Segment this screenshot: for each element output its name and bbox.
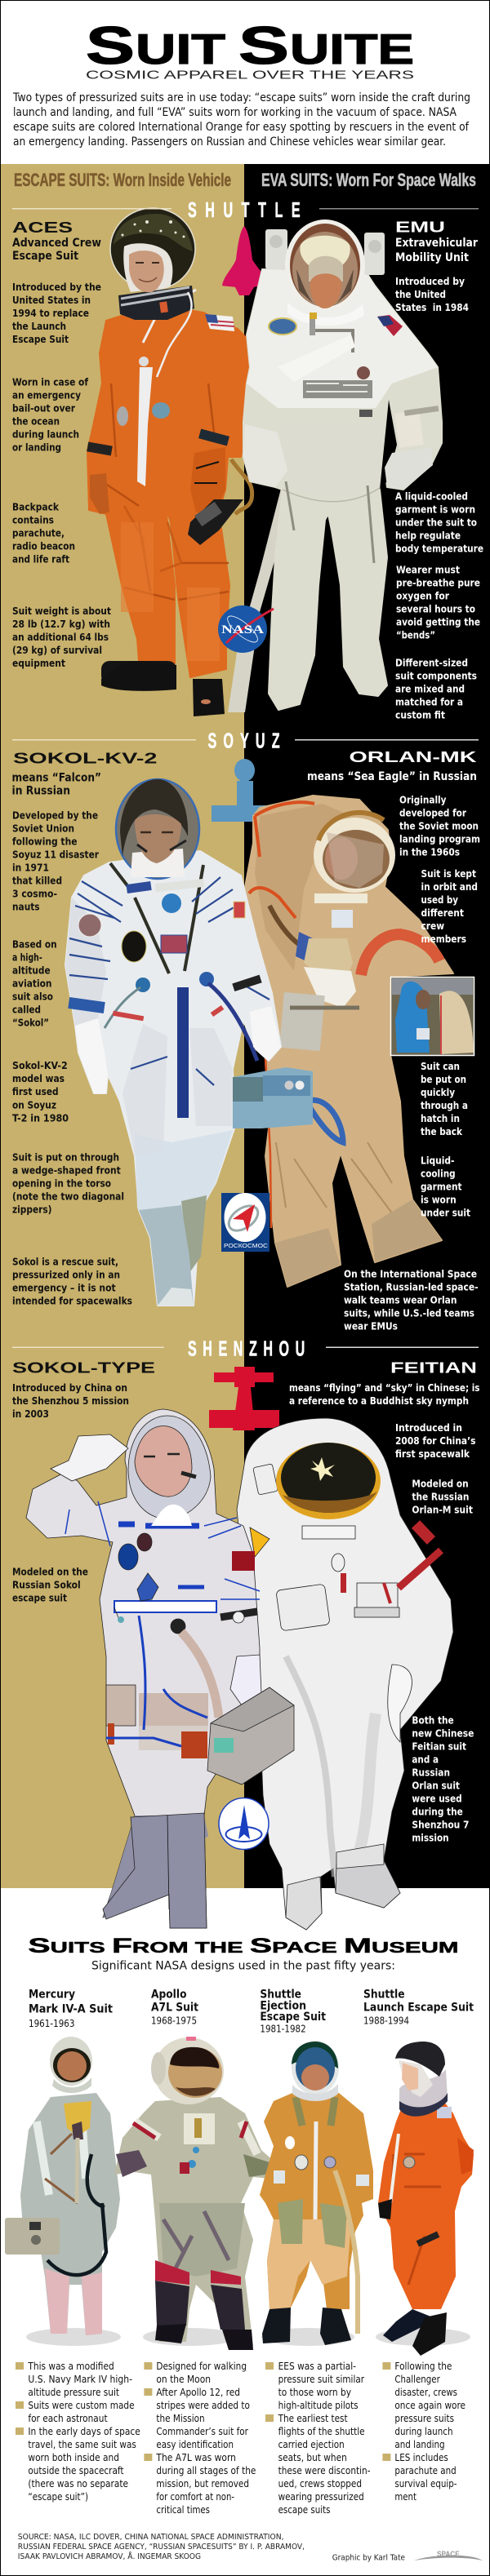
title: S	[238, 16, 289, 75]
bullet column: Shuttle Ejection: wearing pressurized	[278, 2491, 364, 2503]
text: Feitian mission: Both the	[412, 1714, 454, 1726]
title: S	[86, 16, 135, 75]
text: Sokol-type heading: Introduced by China on	[12, 1382, 127, 1394]
text: ACES bail-out: bail-out over	[12, 403, 75, 415]
text: Sokol-type heading	[12, 1360, 155, 1420]
text: Feitian mission: mission	[412, 1833, 449, 1844]
title: UIT	[136, 26, 225, 73]
bullet column: Shuttle Launch	[382, 2361, 466, 2503]
bullet column: Shuttle Ejection: escape suits	[278, 2504, 330, 2516]
bullet column: Shuttle Ejection: EES was a partial-	[278, 2361, 356, 2372]
text: Orlan ISS: On the International Space	[344, 1268, 477, 1279]
text: ACES bail-out: Worn in case of	[12, 377, 89, 388]
bullet column: Mercury: This was a modified	[28, 2361, 114, 2372]
bullet column: Shuttle Ejection: to those worn by	[278, 2387, 351, 2398]
text: ACES backpack: and life raft	[12, 554, 69, 565]
text: EMU sizes: suit components	[395, 671, 477, 682]
text: EMU sizes: matched for a	[395, 697, 463, 708]
text: Sokol origin: in 1971	[12, 862, 49, 873]
bullet column: Shuttle Ejection: carried ejection	[278, 2439, 345, 2450]
text: Orlan origin: developed for	[399, 807, 466, 818]
text: Sokol basis: Based on	[12, 938, 57, 950]
text: Feitian heading: FEITIAN	[390, 1360, 477, 1377]
text: EMU pre-breathe	[396, 565, 480, 641]
source credits: SOURCE: NASA, ILC DOVER, CHINA NATIONAL SPACE ADMINISTRATION,	[18, 2533, 284, 2542]
label: Apollo	[151, 1988, 198, 2027]
subtitle: COSMIC APPAREL OVER THE YEARS	[86, 69, 414, 82]
text: ACES backpack: contains	[12, 515, 54, 526]
logo: Space.com	[414, 2550, 483, 2560]
text: EMU intro: States in 1984	[395, 302, 469, 313]
text: Orlan hatch: the back	[421, 1126, 463, 1137]
figure: Apollo A7L suit	[114, 2037, 275, 2350]
text: EMU sizes	[395, 658, 477, 721]
text: Sokol model: Sokol-KV-2	[12, 1060, 68, 1071]
text: Sokol origin: 3 cosmo-	[12, 888, 57, 899]
intro text	[12, 91, 470, 149]
section label: Shenzhou: SHENZHOU	[188, 1337, 305, 1361]
bullet column: Shuttle Launch: disaster, crews	[394, 2387, 457, 2398]
bullet column: Apollo: stripes were added to	[156, 2400, 250, 2411]
bullet column: Apollo: mission, but removed	[156, 2478, 249, 2490]
text: ACES bail-out: during launch	[12, 429, 79, 441]
bullet column: Mercury: outside the spacecraft	[28, 2465, 124, 2476]
text: Sokol entry: opening in the torso	[12, 1178, 111, 1190]
text: Sokol basis	[12, 938, 57, 1028]
text: Sokol basis: a high-	[12, 951, 42, 963]
text: EMU pre-breathe: Wearer must	[396, 565, 460, 576]
text: Sokol model: model was	[12, 1073, 65, 1084]
text: Feitian heading: a reference to a Buddhist sky nymph	[289, 1395, 469, 1407]
text: Sokol rescue: emergency – it is not	[12, 1283, 116, 1294]
figure: Mercury suit	[5, 2037, 121, 2346]
bullet column: Shuttle Launch: ment	[394, 2491, 416, 2503]
text: Orlan hatch	[421, 1061, 468, 1137]
label: Mercury: Mercury	[29, 1988, 75, 2001]
bullet column: Mercury: (there was no separate	[28, 2478, 128, 2490]
label: Shuttle Ejection: Shuttle	[260, 1988, 301, 2001]
text: Sokol origin: nauts	[12, 901, 40, 912]
bullet column: Shuttle Launch: survival equip-	[394, 2478, 457, 2490]
text: Feitian mission: new Chinese	[412, 1727, 474, 1739]
text: Sokol-type model: Modeled on the	[12, 1566, 88, 1577]
text: EMU pre-breathe: avoid getting the	[396, 617, 480, 628]
flag patch	[205, 314, 234, 331]
instrument case	[233, 1067, 313, 1128]
text: EMU sizes: are mixed and	[395, 684, 465, 695]
bullet column: Mercury: travel, the same suit was	[28, 2439, 136, 2450]
text: EMU cooling	[395, 490, 483, 554]
text: Sokol-type heading: in 2003	[12, 1408, 49, 1420]
label: Apollo: Apollo	[151, 1988, 187, 2001]
text: Sokol rescue: intended for spacewalks	[12, 1296, 132, 1307]
bullet column: Mercury: “escape suit”)	[28, 2491, 88, 2503]
text: ACES backpack	[12, 502, 75, 565]
figure: Shuttle Ejection suit	[260, 2041, 373, 2346]
text: Orlan ISS: walk teams wear Orlan	[344, 1294, 457, 1306]
bullet column: Mercury: for each astronaut	[28, 2413, 108, 2424]
text: EMU sizes: custom fit	[395, 710, 445, 721]
panel: escape suits background	[1, 164, 244, 1888]
bullet column: Apollo: Commander’s suit for	[156, 2426, 248, 2437]
icon: Soyuz spacecraft	[212, 759, 278, 822]
text: ACES heading	[12, 219, 101, 263]
text: Sokol model: T-2 in 1980	[12, 1113, 69, 1124]
figure: Shuttle Launch suit	[376, 2042, 474, 2356]
label: Apollo: A7L Suit	[151, 2001, 198, 2014]
text: Orlan heading	[307, 749, 477, 783]
section label: Shuttle: SHUTTLE	[188, 197, 301, 222]
label: Mercury: Mark IV-A Suit	[29, 2003, 113, 2016]
text: Orlan orbit: different	[421, 907, 464, 919]
icon: Shenzhou spacecraft	[209, 1367, 279, 1430]
text: Orlan orbit: crew	[421, 920, 444, 932]
text: Feitian mission: Orlan suit	[412, 1780, 460, 1791]
title: UITE	[290, 26, 414, 73]
bullet column: Shuttle Launch: parachute and	[394, 2465, 457, 2476]
text: ACES backpack: radio beacon	[12, 541, 75, 552]
bullet column: Shuttle Ejection: pressure suit similar	[278, 2374, 364, 2385]
bullet column: Shuttle Launch: pressure suits	[394, 2413, 454, 2424]
figure: ACES orange suit	[87, 208, 255, 716]
text: Sokol entry: (note the two diagonal	[12, 1191, 124, 1203]
label: Shuttle Launch	[363, 1988, 474, 2027]
text: Sokol-type model: escape suit	[12, 1592, 67, 1603]
bullet column: Apollo: during all stages of the	[156, 2465, 256, 2476]
text: Feitian model: Modeled on	[412, 1479, 469, 1490]
text: EMU pre-breathe: pre-breathe pure	[396, 578, 480, 589]
bullet column: Shuttle Ejection: ued, crews stopped	[278, 2478, 362, 2490]
text: Sokol entry	[12, 1152, 124, 1216]
text: Feitian mission: during the	[412, 1806, 463, 1817]
label: Shuttle Launch: Shuttle	[363, 1988, 405, 2001]
text: ACES weight: equipment	[12, 658, 65, 669]
text: ACES bail-out	[12, 377, 89, 454]
bullet column: Shuttle Ejection: high-altitude pilots	[278, 2400, 359, 2411]
bullet column: Apollo: easy identification	[156, 2439, 234, 2450]
logo: NASA: NASA	[221, 623, 264, 636]
text: Sokol basis: “Sokol”	[12, 1017, 49, 1028]
text: Orlan cooling: Liquid-	[421, 1155, 455, 1167]
text: Sokol rescue	[12, 1257, 132, 1307]
text: Orlan hatch: quickly	[421, 1087, 455, 1098]
text: EMU heading: EMU	[395, 219, 445, 235]
text: Feitian intro: first spacewalk	[395, 1448, 470, 1460]
text: Sokol basis: aviation	[12, 978, 52, 989]
text: EMU pre-breathe: several hours to	[396, 604, 475, 615]
label: Apollo: 1968-1975	[151, 2015, 197, 2027]
label: Shuttle Launch: 1988-1994	[363, 2015, 409, 2027]
text: Sokol basis: suit also	[12, 991, 53, 1002]
text: EMU heading: Extravehicular	[395, 237, 478, 250]
inset photo	[390, 978, 474, 1056]
label: Shuttle Launch: Launch Escape Suit	[363, 2001, 474, 2014]
text: Sokol-type heading: SOKOL-TYPE	[12, 1360, 155, 1377]
subheading: Significant NASA designs used in the past fifty years:	[91, 1959, 395, 1972]
text: EMU heading	[395, 219, 478, 264]
text: ACES bail-out: or landing	[12, 442, 61, 454]
text: Feitian mission: Shenzhou 7	[412, 1819, 469, 1830]
figure: Feitian suit	[237, 1418, 453, 1930]
label: Shuttle Ejection	[260, 1988, 326, 2035]
bullet column: Shuttle Ejection: flights of the shuttle	[278, 2426, 365, 2437]
text: Sokol rescue: pressurized only in an	[12, 1270, 120, 1281]
text: Orlan ISS	[344, 1268, 479, 1332]
text: ACES heading: Escape Suit	[12, 250, 78, 263]
text: Sokol entry: zippers)	[12, 1204, 52, 1216]
text: Sokol-KV-2 heading: in Russian	[11, 784, 70, 797]
source credits: RUSSIAN FEDERAL SPACE AGENCY, “RUSSIAN SPACESUITS” BY I. P. ABRAMOV,	[18, 2543, 305, 2552]
bullet column: Shuttle Launch: Challenger	[394, 2374, 440, 2385]
text: EMU cooling: help regulate	[395, 530, 461, 541]
column heading: escape suits: ESCAPE SUITS: Worn Inside Vehicle	[14, 170, 231, 190]
text: Orlan hatch: be put on	[421, 1074, 466, 1085]
text: Sokol entry: Suit is put on through	[12, 1152, 119, 1164]
text: ACES intro: Introduced by the	[12, 282, 101, 293]
text: Sokol origin: Soviet Union	[12, 822, 74, 834]
text: Sokol origin: Soyuz 11 disaster	[12, 849, 99, 860]
bullet column: Shuttle Launch: once again wore	[394, 2400, 466, 2411]
text: Orlan heading: ORLAN-MK	[350, 749, 477, 765]
text: EMU intro: the United	[395, 289, 446, 300]
text: Feitian heading	[289, 1360, 480, 1407]
logo: CNSA	[219, 1798, 269, 1849]
figure: Orlan-MK suit	[245, 796, 474, 1287]
text: EMU heading: Mobility Unit	[395, 251, 469, 264]
instrument case	[207, 1687, 294, 1785]
logo: NASA	[218, 605, 274, 653]
bullet column: Shuttle Ejection: seats, but when	[278, 2452, 347, 2463]
text: Sokol basis: called	[12, 1004, 41, 1015]
figure: Sokol-type suit	[26, 1409, 294, 1928]
figure: Sokol-KV-2 suit	[65, 779, 313, 1306]
text: EMU cooling: under the suit to	[395, 517, 477, 528]
bullet column: Apollo: the Mission	[156, 2413, 205, 2424]
flag patch	[377, 315, 403, 336]
bullet column: Shuttle Launch: Following the	[394, 2361, 452, 2372]
text: ACES bail-out: the ocean	[12, 416, 60, 428]
bullet column: Apollo	[144, 2361, 256, 2516]
bullet column: Apollo: After Apollo 12, red	[156, 2387, 240, 2398]
text: Orlan orbit: in orbit and	[421, 881, 478, 893]
text: Feitian model: Orlan-M suit	[412, 1505, 473, 1516]
bullet column: Shuttle Launch: and landing	[394, 2439, 445, 2450]
text: Sokol-type model	[12, 1566, 88, 1603]
label: Shuttle Ejection: Ejection	[260, 1999, 306, 2012]
bullet column: Mercury: worn both inside and	[28, 2452, 119, 2463]
text: Orlan origin: Originally	[399, 794, 447, 805]
logo: Space.com: SPACE.	[437, 2550, 461, 2558]
bullet column: Shuttle Launch: during launch	[394, 2426, 452, 2437]
label: Shuttle Ejection: Escape Suit	[260, 2011, 326, 2024]
bullet column: Shuttle Launch: LES includes	[394, 2452, 448, 2463]
text: Sokol model: on Soyuz	[12, 1100, 56, 1111]
bullet column: Apollo: The A7L was worn	[156, 2452, 236, 2463]
graphic credit: Graphic by Karl Tate	[332, 2554, 405, 2563]
text: Sokol rescue: Sokol is a rescue suit,	[12, 1257, 118, 1268]
text: Orlan origin: in the 1960s	[399, 846, 460, 858]
bullet column: Apollo: Designed for walking	[156, 2361, 247, 2372]
text: Orlan orbit	[421, 868, 478, 945]
bullet column: Mercury: U.S. Navy Mark IV high-	[28, 2374, 132, 2385]
source credits	[18, 2533, 305, 2561]
bullet column: Mercury: altitude pressure suit	[28, 2387, 119, 2398]
text: Orlan cooling: is worn	[421, 1195, 457, 1206]
text: Sokol origin: that killed	[12, 875, 62, 886]
text: Sokol entry: a wedge-shaped front	[12, 1165, 121, 1177]
text: Orlan origin: landing program	[399, 833, 480, 845]
text: Sokol origin: Developed by the	[12, 809, 98, 821]
text: Sokol-type heading: the Shenzhou 5 mission	[12, 1395, 129, 1407]
bullet column: Mercury: In the early days of space	[28, 2426, 140, 2437]
heading: Suits From the Space Museum: S UITS F ROM THE S PACE M USEUM	[28, 1935, 458, 1957]
text: Feitian intro	[395, 1422, 475, 1460]
text: Orlan hatch: hatch in	[421, 1113, 460, 1124]
logo: Roscosmos	[221, 1193, 270, 1252]
text: Orlan origin: the Soviet moon	[399, 820, 479, 831]
text: Sokol origin: following the	[12, 836, 77, 847]
text: ACES intro: 1994 to replace	[12, 308, 89, 319]
section label: Soyuz: SOYUZ	[207, 729, 280, 753]
text: EMU pre-breathe: oxygen for	[396, 591, 449, 602]
text: Orlan cooling: under suit	[421, 1208, 470, 1219]
text: Orlan cooling: garment	[421, 1182, 462, 1193]
text: EMU sizes: Different-sized	[395, 658, 468, 669]
text: EMU intro	[395, 276, 469, 313]
text: Sokol model: first used	[12, 1086, 59, 1097]
text: Orlan orbit: members	[421, 933, 466, 945]
logo: Roscosmos: РОСКОСМОС	[224, 1242, 269, 1249]
text: Sokol-KV-2 heading: SOKOL-KV-2	[13, 750, 157, 766]
text: ACES weight: an additional 64 lbs	[12, 632, 109, 643]
bullet column: Shuttle Ejection: The earliest test	[278, 2413, 348, 2424]
text: ACES intro: Escape Suit	[12, 334, 69, 345]
text: ACES weight: Suit weight is about	[12, 605, 111, 617]
text: Feitian model: the Russian	[412, 1492, 469, 1503]
text: Orlan cooling	[421, 1155, 470, 1219]
text: Feitian mission: Russian	[412, 1767, 450, 1778]
text: Feitian mission: and a	[412, 1754, 439, 1765]
bullet column: Mercury: Suits were custom made	[28, 2400, 135, 2411]
text: Sokol-KV-2 heading: means “Falcon”	[11, 771, 101, 784]
bullet column: Mercury	[16, 2361, 140, 2503]
text: Feitian mission: Feitian suit	[412, 1740, 466, 1752]
bullet column: Apollo: on the Moon	[156, 2374, 211, 2385]
text: EMU pre-breathe: “bends”	[396, 630, 435, 641]
text: Orlan hatch: Suit can	[421, 1061, 460, 1072]
label: Mercury: 1961-1963	[29, 2018, 75, 2029]
text: Orlan ISS: wear EMUs	[344, 1320, 398, 1332]
text: Feitian mission	[412, 1714, 474, 1844]
text: Orlan ISS: suits, while U.S.-led teams	[344, 1307, 474, 1319]
text: Sokol origin	[12, 809, 99, 912]
text: ACES backpack: Backpack	[12, 502, 60, 513]
text: Sokol model	[12, 1060, 69, 1124]
text: Sokol basis: altitude	[12, 964, 51, 976]
text: ACES backpack: parachute,	[12, 528, 65, 539]
figure: EMU white suit	[228, 219, 442, 712]
label: Mercury	[29, 1988, 113, 2029]
text: Feitian intro: Introduced in	[395, 1422, 462, 1434]
text: Orlan hatch: through a	[421, 1100, 468, 1111]
text: Orlan orbit: Suit is kept	[421, 868, 476, 880]
bullet column: Apollo: critical times	[156, 2504, 210, 2516]
source credits: ISAAK PAVLOVICH ABRAMOV, Å. INGEMAR SKOOG	[18, 2551, 201, 2561]
text: ACES intro: the Launch	[12, 321, 66, 332]
text: ACES bail-out: an emergency	[12, 390, 81, 401]
text: Orlan orbit: used by	[421, 894, 458, 906]
text: Orlan origin	[399, 794, 480, 858]
text: ACES intro: United States in	[12, 295, 91, 306]
text: ACES weight: 28 lb (12.7 kg) with	[12, 619, 110, 630]
label: Shuttle Ejection: 1981-1982	[260, 2024, 306, 2035]
text: EMU intro: Introduced by	[395, 276, 465, 287]
text: Sokol-KV-2 heading	[11, 750, 157, 797]
text: ACES heading: Advanced Crew	[12, 237, 101, 250]
text: ACES intro	[12, 282, 101, 345]
panel: EVA suits background	[244, 164, 490, 1888]
title	[86, 16, 414, 75]
text: Orlan cooling: cooling	[421, 1168, 456, 1180]
text: EMU cooling: garment is worn	[395, 503, 475, 515]
text: ACES heading: ACES	[12, 219, 73, 236]
text: Feitian intro: 2008 for China’s	[395, 1435, 475, 1447]
text: ACES weight	[12, 605, 111, 669]
text: ACES weight: (29 kg) of survival	[12, 645, 102, 656]
bullet column: Apollo: for comfort at non-	[156, 2491, 234, 2503]
text: EMU cooling: A liquid-cooled	[395, 490, 468, 502]
instrument case	[5, 2218, 60, 2255]
text: Sokol-type model: Russian Sokol	[12, 1579, 81, 1590]
text: Feitian mission: were used	[412, 1793, 462, 1804]
text: Feitian model	[412, 1479, 473, 1516]
icon: shuttle	[222, 226, 268, 295]
bullet column: Shuttle Ejection	[265, 2361, 371, 2516]
bullet column: Shuttle Ejection: these were discontin-	[278, 2465, 371, 2476]
